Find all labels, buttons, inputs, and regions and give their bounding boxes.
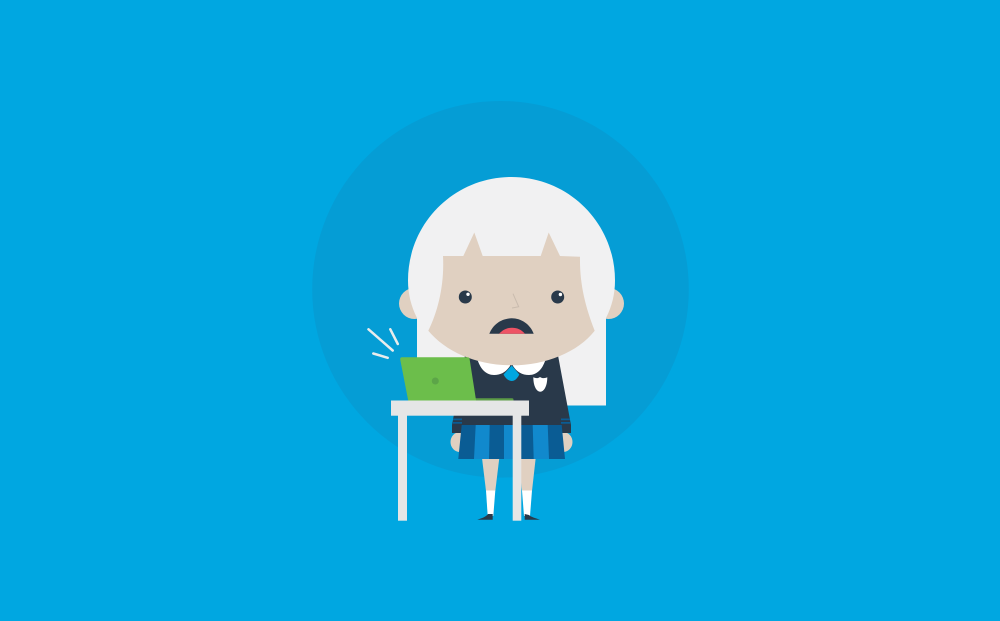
nose bbox=[512, 294, 519, 308]
legs and socks bbox=[477, 458, 540, 520]
tongue bbox=[499, 328, 525, 334]
right desk leg bbox=[513, 415, 521, 521]
pocket badge bbox=[533, 377, 547, 392]
left shoe bbox=[477, 514, 493, 520]
background circle bbox=[312, 101, 689, 478]
laptop logo dot bbox=[432, 378, 439, 384]
dress body bbox=[452, 350, 571, 433]
laptop screen bbox=[400, 357, 476, 402]
right leg bbox=[518, 458, 536, 491]
mouth bbox=[489, 318, 534, 334]
face bbox=[428, 232, 595, 365]
alert lines bbox=[368, 329, 398, 358]
laptop base bbox=[474, 398, 514, 402]
bow bbox=[504, 366, 519, 381]
collar bbox=[477, 358, 546, 375]
left eye bbox=[459, 290, 472, 304]
ears bbox=[399, 288, 624, 319]
pleated skirt bbox=[458, 425, 565, 459]
hair bbox=[408, 177, 615, 406]
desk top bbox=[391, 400, 529, 416]
left desk leg bbox=[398, 415, 407, 521]
hands bbox=[450, 432, 572, 452]
sleeve cuffs bbox=[453, 418, 570, 424]
right shoe bbox=[525, 514, 540, 520]
left leg bbox=[482, 458, 499, 491]
right sock bbox=[522, 490, 532, 516]
desk bbox=[391, 400, 529, 521]
right eye bbox=[551, 290, 564, 304]
left sock bbox=[486, 490, 495, 516]
